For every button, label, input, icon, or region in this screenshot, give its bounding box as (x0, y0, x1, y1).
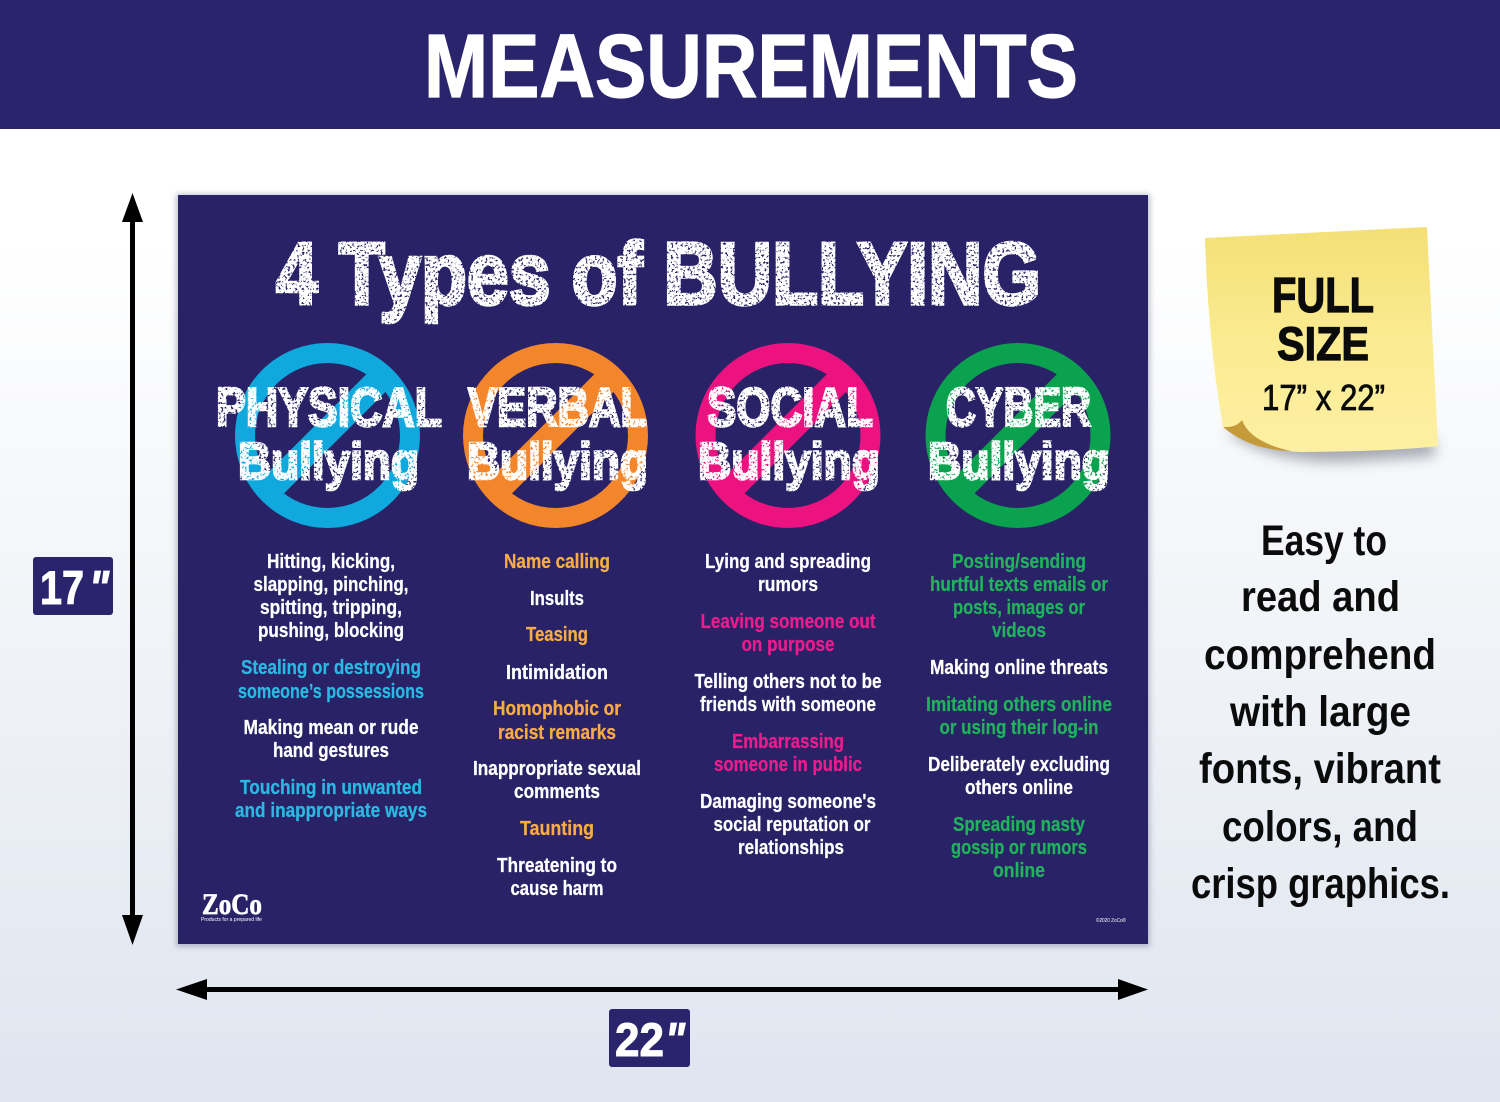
arrow: width (176, 979, 1148, 1000)
text column: verbal: Name calling (504, 551, 610, 573)
note text: 17” x 22” (1262, 377, 1385, 418)
text column: cyber: Posting/sending (952, 551, 1086, 573)
label: 17 inches (33, 557, 113, 615)
text column: verbal: Threatening to (497, 855, 617, 877)
heading: verbal bullying: Bullying (467, 433, 648, 491)
text column: physical: slapping, pinching, (254, 574, 408, 596)
text column: cyber: Making online threats (930, 657, 1108, 679)
heading: verbal bullying: VERBAL (468, 376, 647, 438)
icon: social prohibition sign (706, 353, 870, 518)
text column: cyber: posts, images or (953, 597, 1085, 619)
text column: cyber: hurtful texts emails or (930, 574, 1108, 596)
copyright: ©2020 ZoCo® (1096, 917, 1126, 924)
text column: social: Telling others not to be (694, 671, 882, 693)
text column: cyber: gossip or rumors (951, 837, 1087, 859)
text column: cyber: videos (992, 620, 1046, 642)
icon: cyber prohibition sign (936, 353, 1100, 518)
logo: ZoCo: ZoCo (202, 888, 262, 921)
side description: comprehend (1204, 631, 1436, 679)
text column: physical (235, 551, 427, 822)
text column: verbal: Insults (530, 588, 584, 610)
heading: social bullying (698, 376, 880, 491)
text column: social: relationships (738, 837, 844, 859)
text column: social (694, 551, 882, 859)
arrow: height (122, 193, 143, 945)
side description (1191, 517, 1450, 908)
text column: verbal: Teasing (526, 624, 588, 646)
heading: physical bullying (216, 376, 442, 491)
label: 17 inches: 17 (40, 561, 84, 614)
side description: fonts, vibrant (1199, 745, 1441, 793)
text column: social: Embarrassing (732, 731, 844, 753)
heading: verbal bullying (467, 376, 648, 491)
text column: physical: pushing, blocking (258, 620, 404, 642)
text column: social: Leaving someone out (700, 611, 876, 633)
text column: verbal: Taunting (520, 818, 594, 840)
icon: physical prohibition sign (245, 353, 410, 518)
title: measurements: MEASUREMENTS (424, 17, 1078, 117)
text column: physical: and inappropriate ways (235, 800, 427, 822)
text column: social: on purpose (742, 634, 834, 656)
text column: social: rumors (758, 574, 818, 596)
poster (176, 194, 1150, 947)
heading: social bullying: SOCIAL (707, 376, 873, 438)
note curl (1223, 420, 1291, 451)
sticky note (1205, 227, 1438, 462)
text column: physical: someone’s possessions (238, 681, 424, 703)
text column: verbal: comments (514, 781, 600, 803)
label: 22 inches: " (665, 1013, 686, 1066)
text column: physical: hand gestures (273, 740, 389, 762)
text column: cyber: Deliberately excluding (928, 754, 1110, 776)
text column: cyber: Imitating others online (926, 694, 1112, 716)
text column: cyber: others online (965, 777, 1073, 799)
poster title: 4 Types of BULLYING (276, 224, 1041, 323)
text column: verbal: Homophobic or (493, 698, 621, 720)
side description: read and (1241, 573, 1400, 621)
label: 17 inches: " (89, 561, 110, 614)
text column: verbal: cause harm (510, 878, 604, 900)
text column: social: Damaging someone's (700, 791, 876, 813)
label: 22 inches: 22 (615, 1013, 664, 1066)
note text: SIZE (1277, 317, 1369, 370)
heading: cyber bullying: CYBER (946, 376, 1091, 438)
label: 22 inches (609, 1009, 690, 1067)
icon: verbal prohibition sign (473, 353, 638, 518)
text column: physical: Making mean or rude (244, 717, 418, 739)
text column: cyber (926, 551, 1112, 882)
text column: social: someone in public (714, 754, 862, 776)
text column: physical: Stealing or destroying (241, 657, 421, 679)
text column: social: Lying and spreading (705, 551, 871, 573)
text column: physical: spitting, tripping, (260, 597, 402, 619)
note text (1262, 269, 1385, 418)
side description: crisp graphics. (1191, 860, 1450, 908)
text column: social: social reputation or (714, 814, 871, 836)
heading: cyber bullying: Bullying (928, 433, 1110, 491)
heading: social bullying: Bullying (698, 433, 880, 491)
heading: physical bullying: Bullying (238, 433, 419, 491)
logo: ZoCo: Products for a prepared life (201, 917, 262, 923)
text column: verbal (473, 551, 641, 900)
text column: physical: Touching in unwanted (240, 777, 422, 799)
heading: physical bullying: PHYSICAL (216, 376, 442, 438)
text column: cyber: or using their log-in (940, 717, 1098, 739)
text column: physical: Hitting, kicking, (267, 551, 395, 573)
text column: verbal: racist remarks (498, 722, 616, 744)
text column: cyber: Spreading nasty (953, 814, 1086, 836)
text column: verbal: Intimidation (506, 662, 608, 684)
note text: FULL (1272, 269, 1374, 323)
side description: Easy to (1261, 517, 1387, 565)
text column: verbal: Inappropriate sexual (473, 758, 641, 780)
heading: cyber bullying (928, 376, 1110, 491)
header band (0, 0, 1500, 129)
side description: with large (1229, 688, 1411, 736)
side description: colors, and (1222, 803, 1418, 851)
text column: social: friends with someone (700, 694, 876, 716)
text column: cyber: online (993, 860, 1045, 882)
